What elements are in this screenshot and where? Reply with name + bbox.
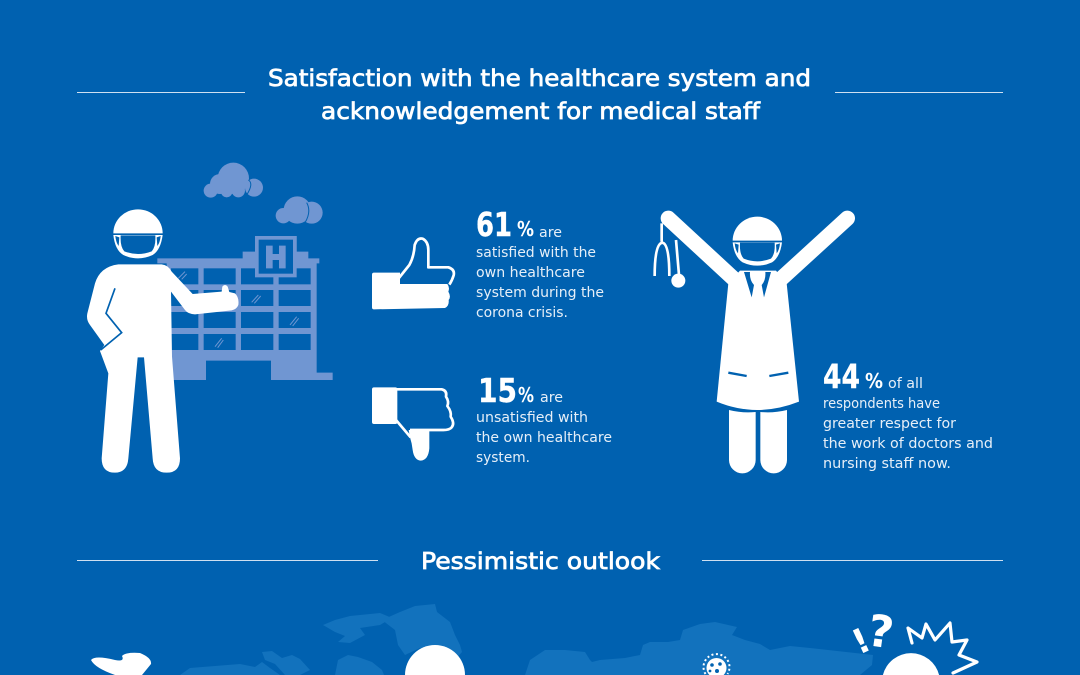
world map bbox=[180, 604, 873, 675]
heading: satisfaction: acknowledgement for medical staff bbox=[321, 97, 761, 125]
stat block: thumbs up 61% bbox=[372, 205, 604, 321]
stat block: thumbs up 61%: are bbox=[539, 225, 562, 241]
icon: head right with burst: ! bbox=[846, 620, 877, 663]
icon: person with mask giving thumbs up bbox=[87, 209, 239, 473]
stat block: 44%: greater respect for bbox=[823, 416, 956, 432]
icon: head right with burst: ? bbox=[864, 605, 897, 659]
icon: head right with burst bbox=[846, 605, 977, 675]
stat block: 44%: nursing staff now. bbox=[823, 456, 951, 472]
icon: thumbs up bbox=[372, 238, 454, 309]
stat block: 44%: % bbox=[865, 369, 883, 393]
stat block: 44% bbox=[823, 357, 993, 472]
stat block: thumbs down 15%: % bbox=[518, 383, 534, 407]
stat block: thumbs down 15% bbox=[372, 371, 612, 466]
stat block: thumbs down 15%: are bbox=[540, 390, 563, 406]
stat block: 44%: 44 bbox=[823, 357, 860, 396]
stat block: 44%: the work of doctors and bbox=[823, 436, 993, 452]
heading: pessimistic outlook: Pessimistic outlook bbox=[421, 547, 660, 575]
icon: thumbs down bbox=[372, 387, 453, 461]
stat block: thumbs up 61%: corona crisis. bbox=[476, 305, 568, 321]
stat block: 44%: respondents have bbox=[823, 396, 940, 412]
stat block: thumbs up 61%: own healthcare bbox=[476, 265, 585, 281]
stat block: thumbs up 61%: % bbox=[517, 217, 534, 241]
stat block: 44%: of all bbox=[888, 376, 923, 392]
stat block: thumbs down 15%: the own healthcare bbox=[476, 430, 612, 446]
stat block: thumbs up 61%: 61 bbox=[476, 205, 512, 244]
icon: doctor with raised arms and stethoscope bbox=[655, 217, 847, 473]
illustration: hospital with clouds bbox=[157, 163, 333, 380]
stat block: thumbs down 15%: system. bbox=[476, 450, 530, 466]
icon: head centre bbox=[405, 645, 465, 675]
heading: satisfaction: Satisfaction with the healthcare system and bbox=[268, 64, 811, 92]
stat block: thumbs up 61%: satisfied with the bbox=[476, 245, 596, 261]
stat block: thumbs up 61%: system during the bbox=[476, 285, 604, 301]
icon: virus bbox=[704, 654, 730, 675]
heading: satisfaction bbox=[268, 64, 811, 125]
stat block: thumbs down 15%: 15 bbox=[478, 371, 517, 410]
stat block: thumbs down 15%: unsatisfied with bbox=[476, 410, 588, 426]
icon: head left bbox=[91, 653, 151, 675]
